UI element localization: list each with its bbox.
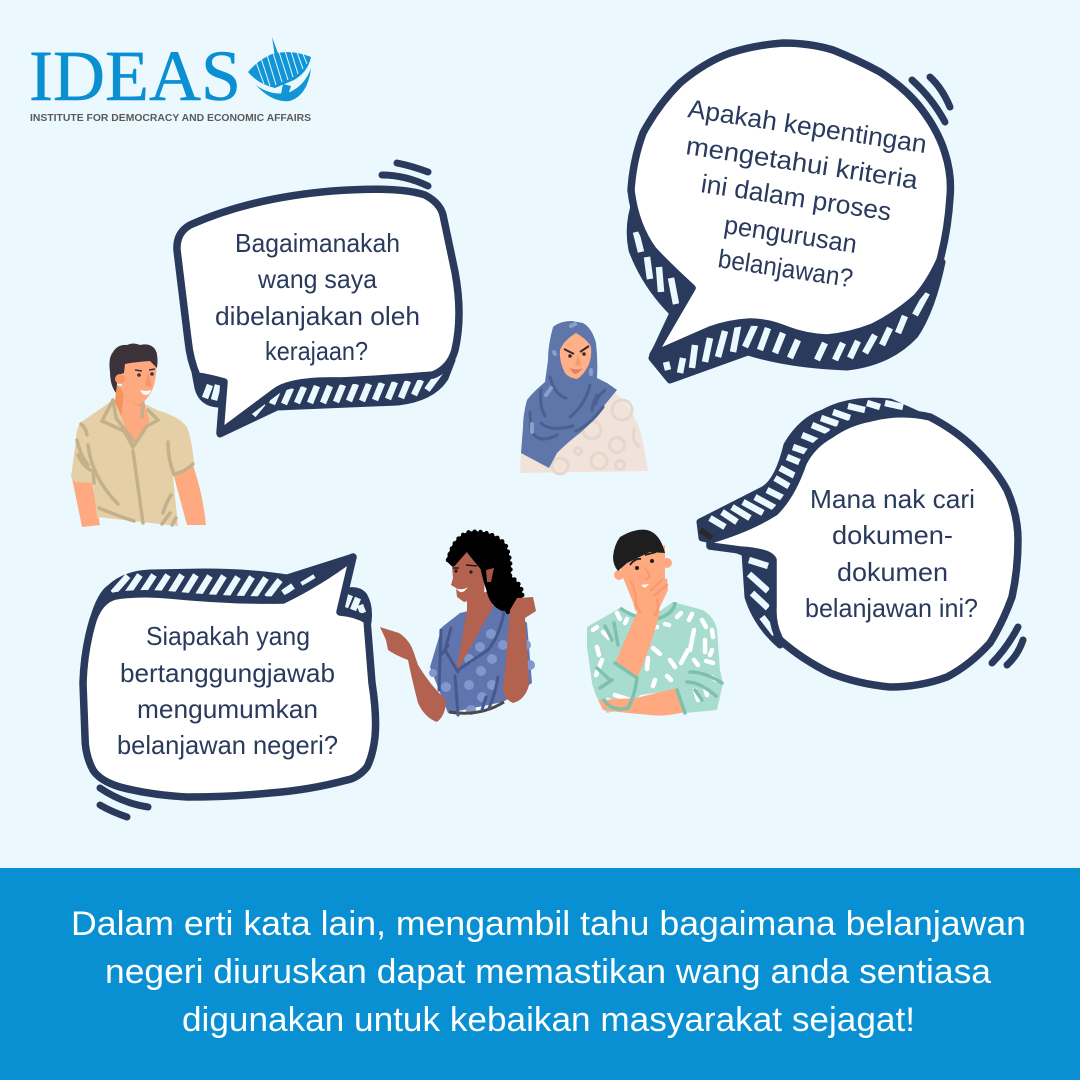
question text: pengurusan [722,209,859,259]
tail tip mark [700,530,712,538]
question text: Apakah kepentingan [686,93,929,159]
banner text: negeri diuruskan dapat memastikan wang anda sentiasa [105,953,992,991]
question text [684,93,929,293]
hair [449,534,520,610]
facial features and fingers [635,566,639,570]
bubble outline band [630,200,942,380]
logo tagline: INSTITUTE FOR DEMOCRACY AND ECONOMIC AFFAIRS [30,112,311,124]
character: thinking man in mint sweater [587,530,723,716]
logo wordmark: IDEAS [29,36,241,116]
question text: mengumumkan [137,694,318,724]
hair [109,344,158,393]
question text: wang saya [257,264,378,294]
question text: belanjawan ini? [805,593,978,623]
logo icon: hatched dove [248,37,311,101]
character: woman with curly hair pointing [380,532,536,722]
sound lines [912,77,950,122]
question text: dokumen- [832,520,953,550]
hijab [521,321,617,468]
hand on chin [628,578,668,618]
facial features [564,346,589,354]
bubble outline band [93,557,368,640]
face [560,333,591,379]
arms [598,600,685,716]
question text: Bagaimanakah [235,228,400,258]
belt [449,702,504,713]
sound lines [382,163,428,186]
bubble stripes [205,371,441,415]
bubble body [710,414,1018,687]
banner background [0,868,1080,1080]
character: woman in blue hijab [520,321,648,474]
question text: Mana nak cari [810,484,975,514]
question text [117,621,338,760]
neck and chest [115,385,150,447]
speech bubble: Mana nak cari [700,401,1023,687]
white sweater pattern [593,613,716,702]
shirt [71,400,194,526]
question text [805,484,978,623]
question text [215,228,420,366]
sweater [587,602,723,713]
shirt folds [77,400,193,525]
question text: Siapakah yang [146,621,310,651]
bubble stripes [636,232,927,373]
bubble body [83,557,376,797]
polka dots [429,629,535,715]
banner text [71,905,1026,1039]
ear and facial features [115,374,125,384]
clothing [520,392,648,473]
question text: belanjawan negeri? [117,730,338,760]
question text: dokumen [837,557,948,587]
shirt [430,603,532,713]
speech bubble: Apakah kepentingan [630,43,950,380]
sound lines [100,788,148,817]
face [451,547,485,602]
speech bubble: Siapakah yang [83,557,376,817]
question text: mengetahui kriteria [684,130,921,195]
bubble body [631,43,950,355]
face [122,352,157,405]
hijab highlights [532,324,591,432]
sweater cuffs and folds [597,623,722,713]
banner text: Dalam erti kata lain, mengambil tahu bagaimana belanjawan [71,905,1026,943]
hijab folds [530,377,605,439]
sound lines [992,627,1023,665]
logo: IDEAS [29,36,311,124]
ear and facial features [486,568,494,582]
question text: ini dalam proses [699,168,893,227]
arms [72,465,206,527]
curly hair edge [448,532,522,612]
banner text: digunakan untuk kebaikan masyarakat sejagat! [182,1001,915,1039]
question text: dibelanjakan oleh [215,301,420,331]
bubble stripes [113,575,363,613]
question text: bertanggungjawab [120,658,335,688]
shirt lines [439,612,504,715]
hair [613,530,665,571]
bubble stripes [710,403,903,634]
sweater neckline [620,602,675,619]
neck and chest [456,590,493,673]
face [620,545,665,617]
question text: belanjawan? [716,243,855,293]
bubble outline band [195,360,452,434]
bubble outline band [700,401,930,645]
clothing pattern [552,400,640,474]
character: man in beige shirt [71,344,206,527]
speech bubble: Bagaimanakah [177,163,459,434]
pointing arm [380,627,446,722]
question text: kerajaan? [265,336,368,366]
bubble body [177,189,459,433]
bottom banner [0,868,1080,1080]
raised arm and fist [503,597,536,703]
